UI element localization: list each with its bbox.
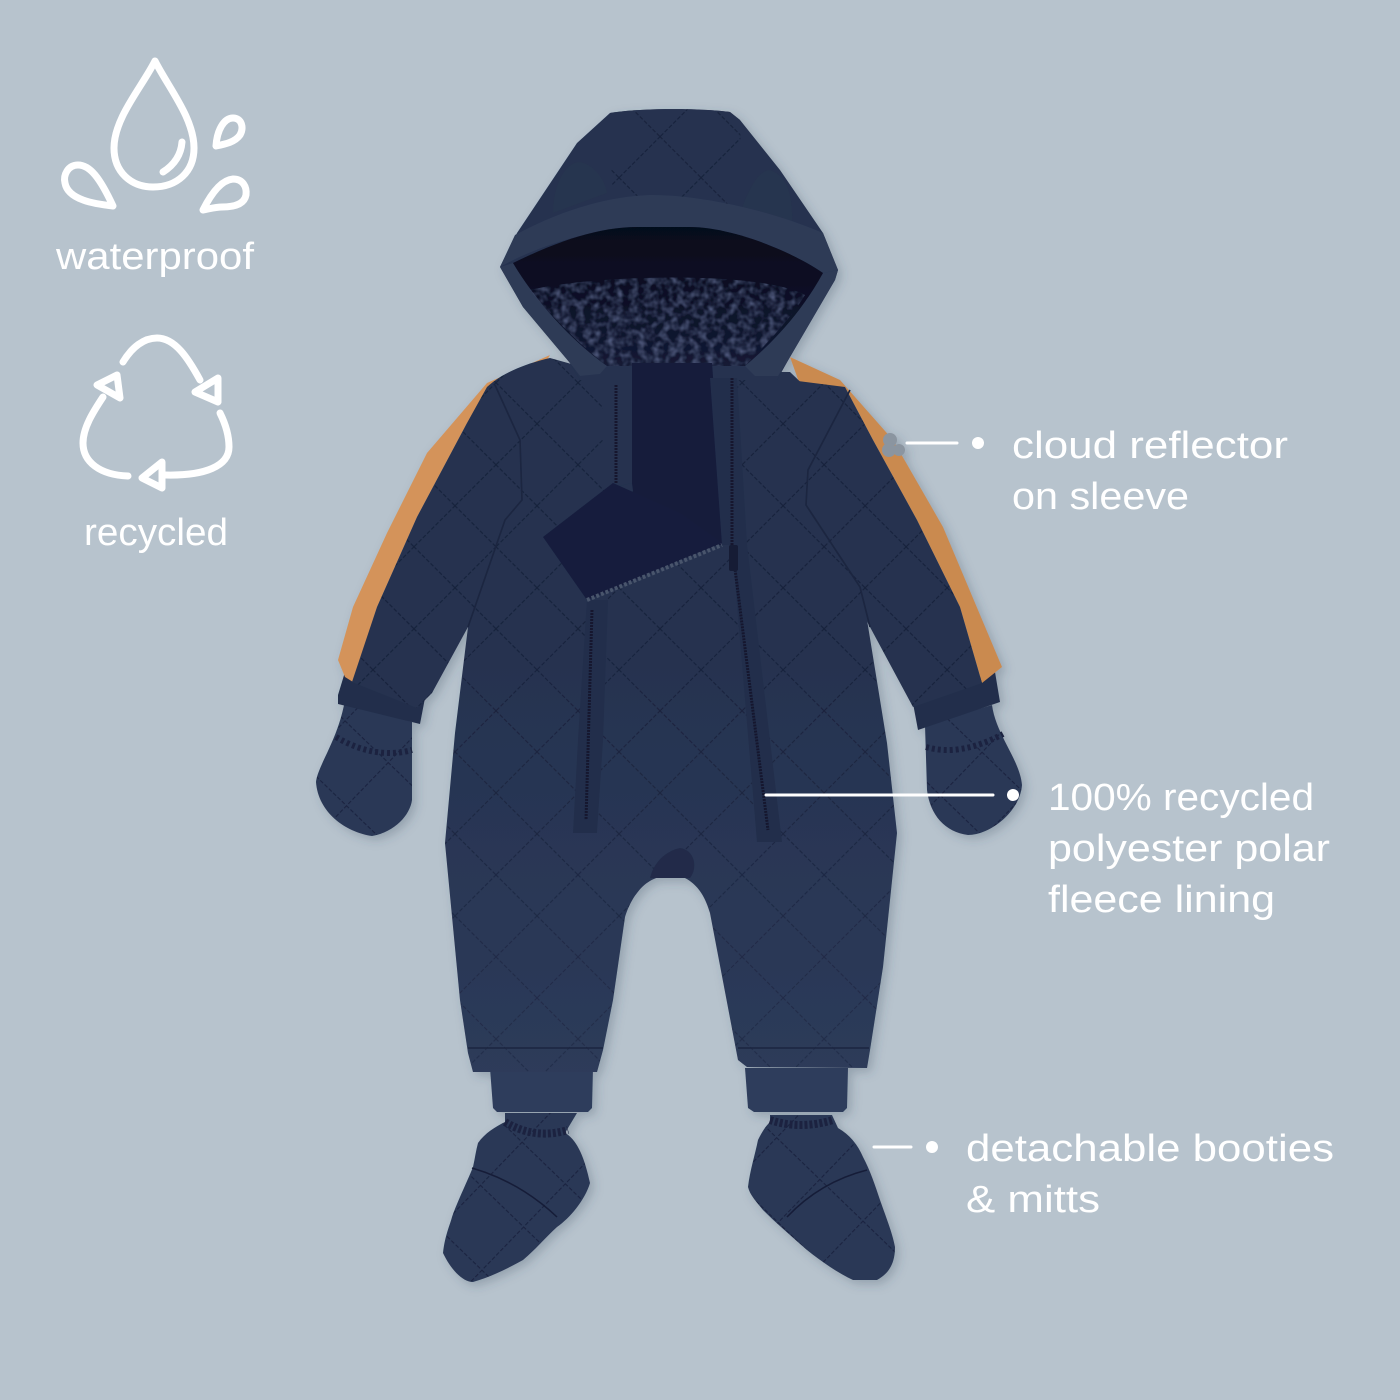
callout: fleece lining: 100% recycled xyxy=(1048,777,1314,819)
callout: fleece lining: polyester polar xyxy=(1048,828,1330,870)
icon: waterproof drops xyxy=(65,61,246,210)
label: waterproof: waterproof xyxy=(55,236,254,278)
booties xyxy=(443,1113,590,1282)
fleece panel xyxy=(632,363,725,545)
hood side flaps xyxy=(500,263,607,376)
callout: cloud reflector: on sleeve xyxy=(1012,476,1189,518)
crotch gusset xyxy=(650,848,694,878)
hood brim xyxy=(500,195,838,273)
cloud reflector xyxy=(882,433,905,457)
leg ribs xyxy=(490,1068,593,1112)
callout: cloud reflector xyxy=(907,425,1288,518)
hood ears xyxy=(553,162,607,213)
callout: fleece lining: fleece lining xyxy=(1048,879,1275,921)
callout: fleece lining xyxy=(766,777,1330,921)
sherpa texture xyxy=(530,278,805,366)
zip pull xyxy=(729,545,738,571)
callout: booties: & mitts xyxy=(966,1179,1100,1221)
hood xyxy=(500,109,838,380)
callout: booties: detachable booties xyxy=(966,1128,1334,1170)
callout: booties xyxy=(874,1128,1334,1221)
plackets and zips xyxy=(603,372,632,490)
torso and legs xyxy=(445,372,897,1072)
mitts xyxy=(316,672,1022,836)
folded flap xyxy=(543,483,722,600)
body folds xyxy=(468,385,870,1048)
label: recycled: recycled xyxy=(84,512,228,554)
icon: recycled arrows xyxy=(83,338,229,488)
snowsuit xyxy=(316,109,1022,1282)
callout: cloud reflector: cloud reflector xyxy=(1012,425,1288,467)
hood lining xyxy=(513,227,823,366)
orange stripes xyxy=(338,355,1002,683)
sleeves xyxy=(352,358,600,708)
